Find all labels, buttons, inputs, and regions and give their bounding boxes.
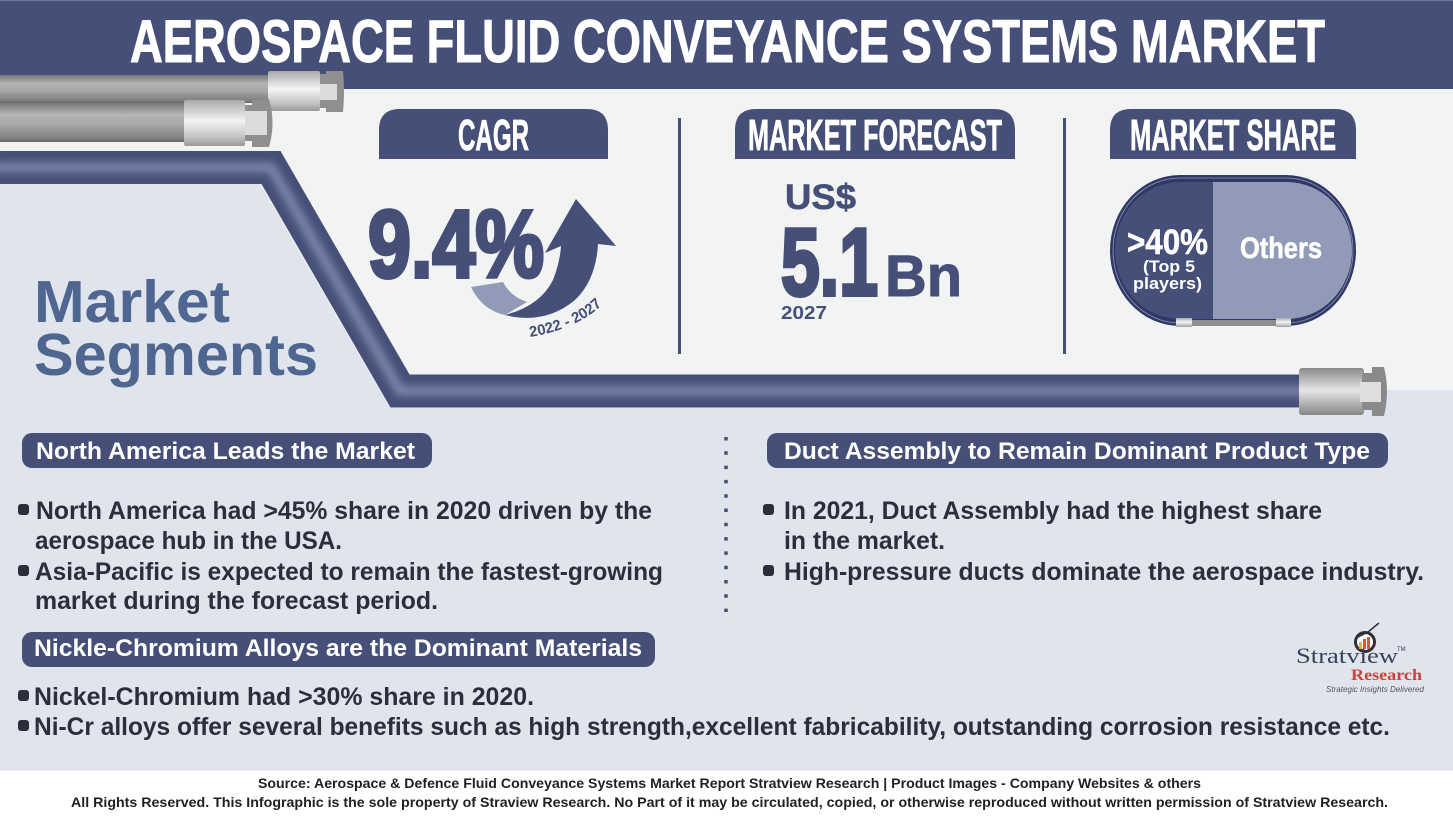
heading: market segments: Segments: [34, 322, 318, 388]
footer: All Rights Reserved. This Infographic is the sole property of Straview Research. No Part of it may be circulated, copied, or otherwise reproduced without written permission of Stratview Research.: [71, 794, 1388, 810]
bullet text: In 2021, Duct Assembly had the highest share: [784, 497, 1322, 525]
panel: market share: [1110, 109, 1356, 327]
icon: magnifier: [1356, 623, 1379, 652]
bullet text: Asia-Pacific is expected to remain the fastest-growing: [35, 558, 663, 586]
bullet text: Ni-Cr alloys offer several benefits such as high strength,excellent fabricability, outstanding corrosion resistance etc.: [34, 713, 1390, 741]
panel: market forecast: [735, 109, 1015, 323]
market forecast tab: [735, 109, 1015, 160]
CAGR tab: CAGR: [458, 111, 529, 160]
segment: materials: [18, 632, 1390, 741]
pill heading: North America Leads the Market: [36, 438, 415, 465]
dotted divider: [724, 437, 728, 612]
icon: upper grey hose: [0, 71, 344, 112]
logo: stratview research: [1296, 623, 1425, 694]
bullet text: Nickel-Chromium had >30% share in 2020.: [34, 683, 534, 711]
market share pill chart: [1110, 175, 1356, 327]
share caption: (Top 5: [1143, 258, 1195, 276]
pill heading: Duct Assembly to Remain Dominant Product Type: [784, 438, 1370, 465]
share value: >40%: [1127, 223, 1208, 262]
CAGR value: 9.4%: [368, 191, 544, 298]
bullet text: [763, 497, 1424, 586]
heading: market segments: [34, 269, 318, 388]
icon: pipe end fitting: [1299, 367, 1387, 416]
footer: Source: Aerospace & Defence Fluid Conveyance Systems Market Report Stratview Research | Product Images - Company Websites & others: [258, 775, 1201, 791]
pipe frame: [0, 168, 1305, 391]
CAGR tab: [379, 109, 608, 160]
bullet text: market during the forecast period.: [35, 587, 438, 615]
bullet text: [18, 497, 663, 615]
bullet text: aerospace hub in the USA.: [35, 527, 342, 555]
market share tab: [1110, 109, 1356, 160]
others label: Others: [1240, 232, 1322, 265]
icon: hose on pill: [1176, 318, 1291, 327]
logo: stratview research: TM: [1397, 647, 1406, 653]
market forecast tab: MARKET FORECAST: [748, 111, 1002, 160]
panel: CAGR: [368, 109, 616, 337]
currency: US$: [785, 178, 856, 217]
forecast year: 2027: [781, 303, 827, 323]
forecast value: 5.1: [781, 209, 878, 316]
background: lower panel: [0, 184, 1453, 770]
segment: north america: [18, 433, 663, 615]
share caption line two: players): [1133, 275, 1202, 293]
divider: [678, 118, 681, 354]
divider: [1063, 118, 1066, 354]
forecast unit: Bn: [885, 244, 962, 309]
logo: stratview research: Research: [1351, 667, 1422, 684]
pill heading: [22, 433, 432, 468]
title banner: [0, 0, 1453, 89]
logo: stratview research: Stratview: [1296, 643, 1398, 668]
bullet text: [18, 683, 1390, 741]
icon: lower grey hose: [0, 99, 272, 147]
bullet text: North America had >45% share in 2020 driven by the: [36, 497, 652, 525]
icon: growth arrow: [471, 199, 616, 318]
logo: stratview research: Strategic Insights Delivered: [1326, 685, 1425, 694]
pill heading: Nickle-Chromium Alloys are the Dominant Materials: [34, 635, 642, 662]
bullet text: in the market.: [784, 527, 945, 555]
footer: [0, 771, 1453, 818]
CAGR period: 2022 - 2027: [529, 298, 600, 337]
bullet text: High-pressure ducts dominate the aerospace industry.: [784, 558, 1424, 586]
segment: duct assembly: [763, 433, 1424, 586]
heading: market segments: Market: [34, 269, 230, 335]
